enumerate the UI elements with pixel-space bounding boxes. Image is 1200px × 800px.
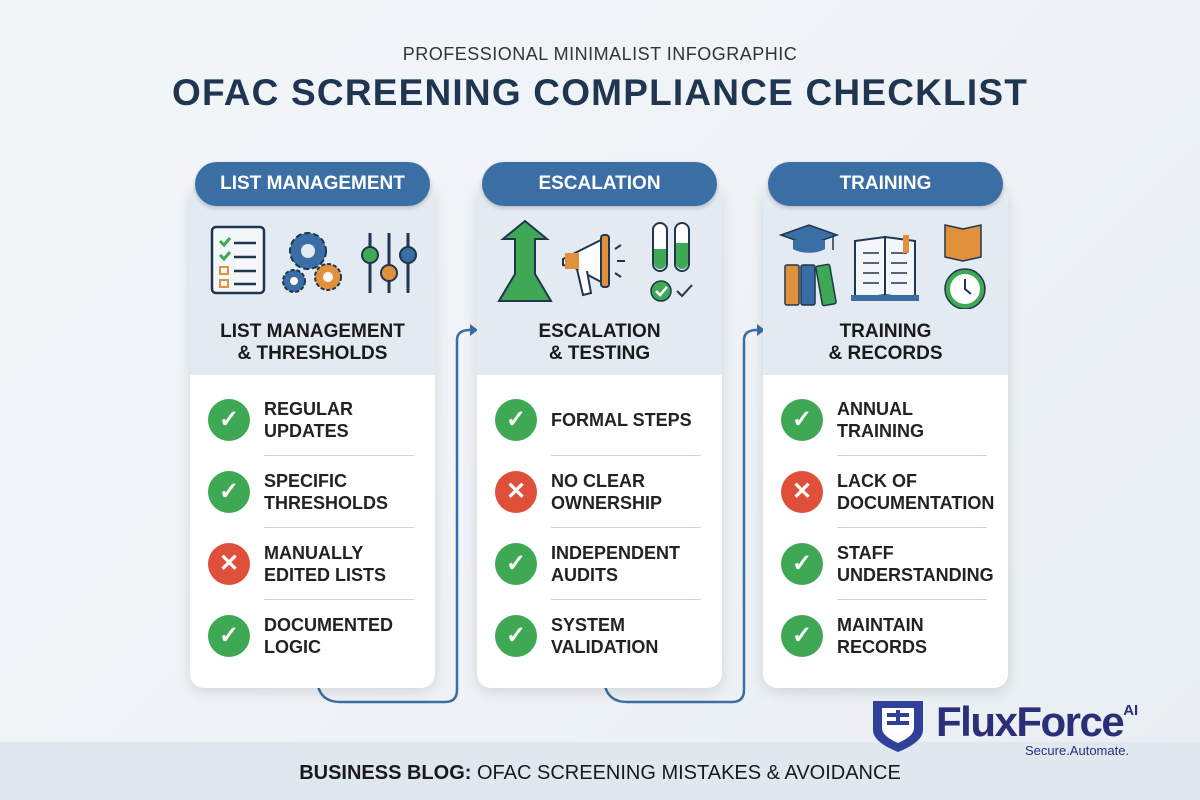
item: manually edited lists [208,543,386,585]
item: regular updates: REGULAR [264,399,353,419]
icons: checklist, gears, sliders [210,226,417,294]
heading: LIST MANAGEMENT [220,321,405,342]
logo: FluxForce [873,698,1138,758]
item: no clear ownership: NO CLEAR [551,471,645,491]
item: staff understanding: STAFF [837,543,894,563]
item: system validation: ✓ [506,622,526,649]
panel: training [763,185,1008,688]
panel: escalation [477,185,722,688]
item: no clear ownership: OWNERSHIP [551,493,662,513]
footer text: BUSINESS BLOG: OFAC SCREENING MISTAKES & AVOIDANCE [299,762,901,784]
pill: list management: LIST MANAGEMENT [220,173,405,194]
item: lack of documentation: ✕ [792,478,812,505]
item: annual training: ANNUAL [837,399,913,419]
item: documented logic: ✓ [219,622,239,649]
heading: ESCALATION [538,321,661,342]
item: system validation [495,615,658,657]
item: documented logic: DOCUMENTED [264,615,393,635]
item: maintain records [781,615,927,657]
pill: training: TRAINING [840,173,931,194]
item: manually edited lists: EDITED LISTS [264,565,386,585]
arrow: card connectors [317,324,763,704]
heading: & RECORDS [828,343,942,364]
icon: shield [873,701,923,752]
item: formal steps: FORMAL STEPS [551,410,692,430]
icons: arrow, megaphone, test tubes [497,220,693,302]
item: independent audits: ✓ [506,550,526,577]
icons: cap, binders, book, clock [779,224,986,309]
pill: escalation: ESCALATION [538,173,661,194]
item: independent audits [495,543,680,585]
item: no clear ownership: ✕ [506,478,526,505]
item: documented logic: LOGIC [264,637,321,657]
item: lack of documentation: DOCUMENTATION [837,493,994,513]
item: independent audits: AUDITS [551,565,618,585]
title: OFAC SCREENING COMPLIANCE CHECKLIST [172,72,1028,113]
item: staff understanding: UNDERSTANDING [837,565,994,585]
item: system validation: VALIDATION [551,637,658,657]
item: formal steps [495,399,692,441]
item: lack of documentation: LACK OF [837,471,917,491]
item: specific thresholds [208,471,388,513]
title: subtitle: PROFESSIONAL MINIMALIST INFOGRAPHIC [403,44,797,64]
brand text: FluxForceAI [936,698,1138,745]
item: independent audits: INDEPENDENT [551,543,680,563]
item: maintain records: RECORDS [837,637,927,657]
item: specific thresholds: SPECIFIC [264,471,347,491]
pill: escalation [482,162,717,206]
item: manually edited lists: MANUALLY [264,543,363,563]
heading: & TESTING [549,343,650,364]
item: regular updates: ✓ [219,406,239,433]
item: annual training: TRAINING [837,421,924,441]
heading: TRAINING [840,321,931,342]
item: regular updates: UPDATES [264,421,349,441]
item: regular updates [208,399,353,441]
pill: list management [195,162,430,206]
item: no clear ownership [495,471,662,513]
heading [220,321,405,364]
item: annual training: ✓ [792,406,812,433]
heading [828,321,942,364]
item: staff understanding: ✓ [792,550,812,577]
item: maintain records: ✓ [792,622,812,649]
item: annual training [781,399,924,441]
footer band [0,742,1200,800]
item: system validation: SYSTEM [551,615,625,635]
item: specific thresholds: ✓ [219,478,239,505]
pill: training [768,162,1003,206]
heading: & THRESHOLDS [238,343,387,364]
item: lack of documentation [781,471,994,513]
panel: list management [190,185,435,688]
item: specific thresholds: THRESHOLDS [264,493,388,513]
item: formal steps: ✓ [506,406,526,433]
logo: FluxForce: Secure.Automate. [1025,743,1129,758]
item: manually edited lists: ✕ [219,550,239,577]
heading [538,321,661,364]
item: maintain records: MAINTAIN [837,615,924,635]
item: documented logic [208,615,393,657]
item: staff understanding [781,543,994,585]
